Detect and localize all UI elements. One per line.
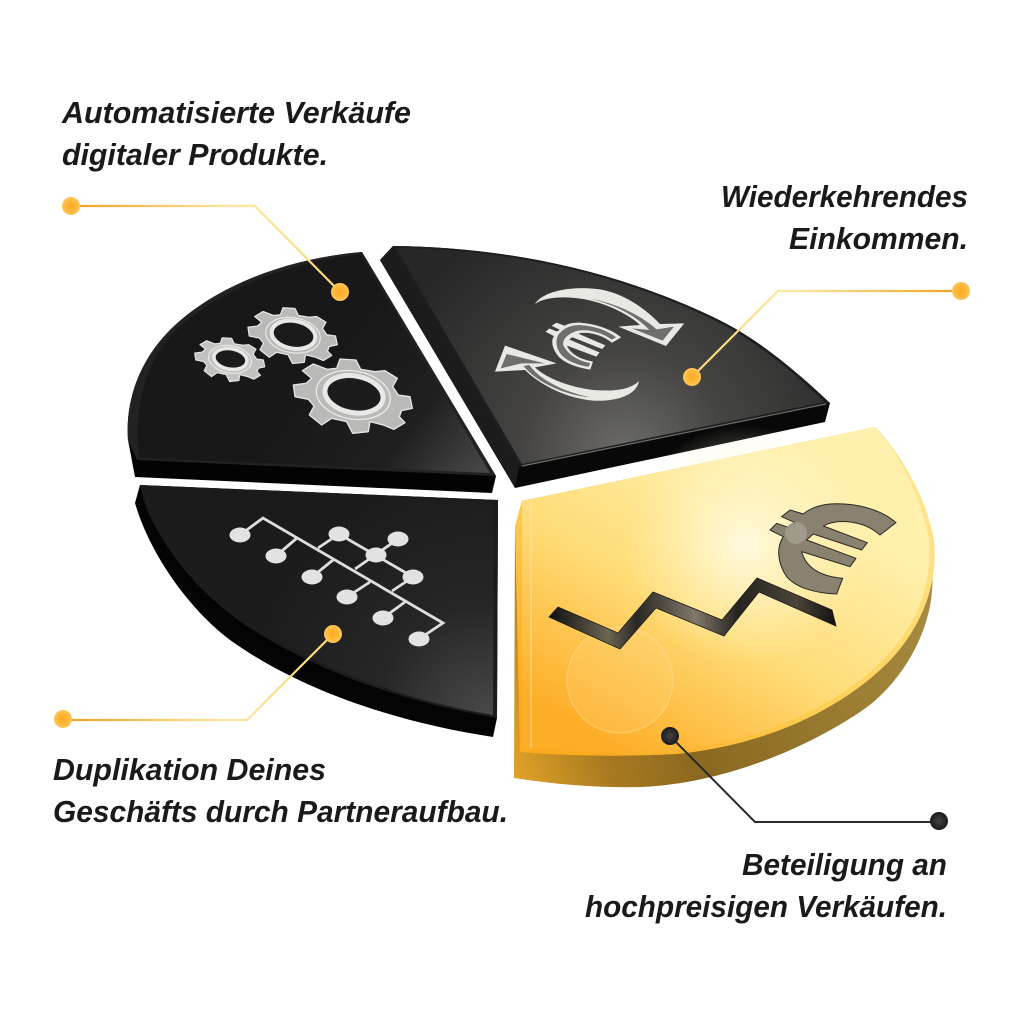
- text block: partner duplication: Geschäfts durch Partneraufbau.: [53, 794, 508, 829]
- text block: automated sales: Automatisierte Verkäufe: [61, 95, 411, 130]
- text block: recurring income: Wiederkehrendes: [721, 179, 968, 214]
- panel: slice top-right, recurring income: [380, 246, 830, 488]
- icon: bottom arrow inner shade: [501, 354, 590, 397]
- text block: recurring income: Einkommen.: [789, 221, 968, 256]
- text block: partner duplication: Duplikation Deines: [53, 752, 326, 787]
- callout: high-ticket sales: [661, 727, 948, 830]
- icon: euro sign: [544, 318, 625, 374]
- panel: slice bottom-left, partner duplication: [135, 485, 498, 737]
- icon: partner network: [230, 518, 443, 646]
- callout: partner duplication: [54, 625, 342, 728]
- icon: rising line: [549, 578, 836, 649]
- icon: euro sign: [770, 504, 896, 594]
- icon: bottom arrow: [495, 346, 639, 401]
- panel: slice top-left, automated sales: [128, 252, 496, 493]
- text block: high-ticket sales: Beteiligung an: [742, 847, 947, 882]
- icon: top arrow inner shade: [590, 299, 674, 341]
- callout: automated sales: [62, 197, 349, 301]
- icon: three gears: [195, 308, 412, 433]
- text block: high-ticket sales: hochpreisigen Verkäufen.: [585, 889, 947, 924]
- text block: automated sales: digitaler Produkte.: [62, 137, 328, 172]
- lens flare circle: [567, 627, 673, 733]
- callout: recurring income: [683, 282, 970, 386]
- icon: top arrow: [535, 288, 684, 346]
- icon: arrows around euro: [495, 288, 684, 401]
- panel: slice bottom-right, gold share of high-ticket sales: [514, 425, 935, 787]
- highlight along front edge: [522, 404, 826, 466]
